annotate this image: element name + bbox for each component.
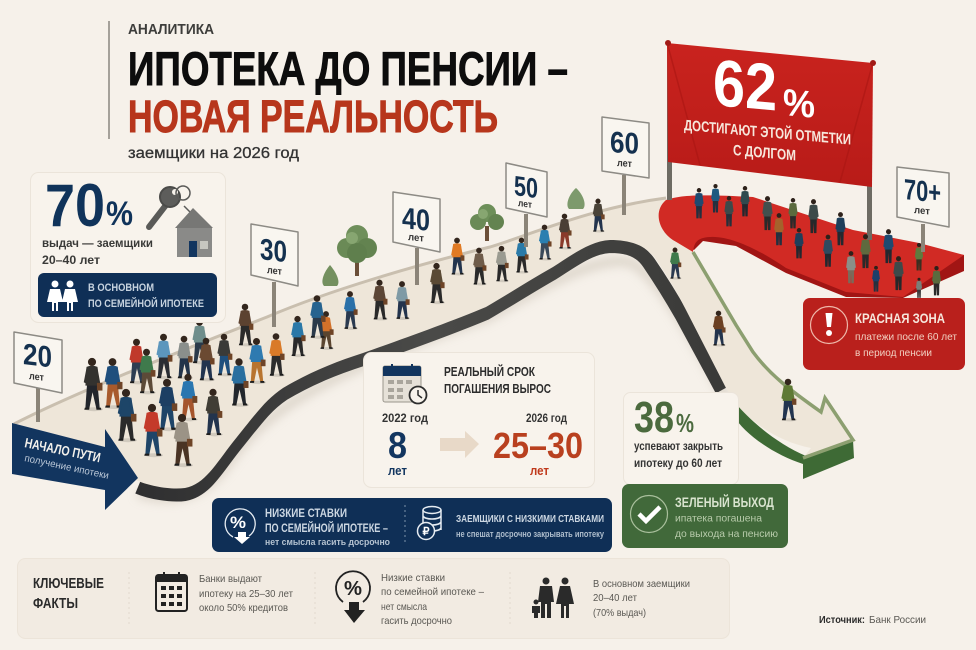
- panel: repayment term: ПОГАШЕНИЯ ВЫРОС: [444, 382, 551, 396]
- source: Источник:: [819, 614, 865, 626]
- panel: green exit: [622, 484, 788, 548]
- panel: repayment term: 25–30: [493, 425, 583, 466]
- age sign 20: [14, 332, 62, 422]
- start arrow caption: получение ипотеки: [23, 453, 110, 482]
- panel: 70% of issuance: [30, 172, 226, 322]
- people on the red platform: [694, 184, 941, 298]
- age sign 30: лет: [267, 265, 282, 278]
- 2022 value: 2022 год: [382, 413, 429, 425]
- fact 2 text: Низкие ставки: [381, 572, 445, 584]
- subtitle: заемщики на 2026 год: [128, 145, 299, 162]
- age sign 60: лет: [617, 158, 632, 170]
- age sign 20: лет: [29, 371, 44, 384]
- age sign 20: 20: [23, 338, 52, 375]
- low rates text: НИЗКИЕ СТАВКИ: [265, 508, 347, 520]
- panel: 38%: %: [676, 408, 694, 438]
- 70 percent figure: 70: [45, 172, 105, 239]
- age sign 60: 60: [610, 126, 639, 161]
- icon: coins: [418, 506, 441, 540]
- people on the green exit road: [670, 248, 797, 421]
- banner: 62%: С ДОЛГОМ: [733, 142, 796, 165]
- banner posts: [667, 45, 872, 240]
- panel: red zone: [803, 298, 965, 370]
- fact 1 text: около 50% кредитов: [199, 602, 288, 614]
- header: [108, 21, 568, 162]
- fact 3 text: [593, 578, 690, 619]
- fact 2 text: нет смысла: [381, 601, 427, 613]
- tree 2: [470, 204, 504, 241]
- icon: key: [149, 186, 192, 227]
- fact 1 text: ипотеку на 25–30 лет: [199, 588, 293, 600]
- navy note: В ОСНОВНОМ: [88, 282, 154, 294]
- panel: green exit: до выхода на пенсию: [675, 528, 778, 540]
- panel: 70% of issuance: %: [106, 195, 133, 233]
- small bush 2: [567, 188, 585, 209]
- banner: 62%: %: [783, 82, 815, 127]
- source: Банк России: [869, 614, 926, 626]
- icon: percent down: %: [230, 513, 246, 532]
- panel: repayment term: [364, 352, 594, 488]
- panel: low rates banner: не спешат досрочно закрывать ипотеку: [456, 529, 604, 539]
- fact 3 text: 20–40 лет: [593, 592, 637, 604]
- fact 2 text: по семейной ипотеке –: [381, 586, 484, 598]
- panel: key facts: ФАКТЫ: [33, 595, 78, 612]
- age sign 50: [506, 163, 547, 247]
- small bush 1: [322, 265, 338, 286]
- icon: couple: [47, 280, 78, 311]
- panel: red zone: в период пенсии: [855, 347, 932, 359]
- source: [819, 614, 926, 626]
- age sign 70+: лет: [914, 205, 930, 218]
- icon: family: [532, 578, 574, 618]
- panel: 38%: [624, 392, 738, 484]
- age sign 40: [393, 192, 440, 285]
- panel: key facts: [18, 558, 730, 638]
- road surface: [12, 198, 853, 489]
- age sign 50: 50: [514, 170, 538, 204]
- icon: house: [175, 208, 213, 257]
- tree 1: [337, 225, 377, 276]
- green road side: [733, 398, 854, 479]
- fact 3 text: В основном заемщики: [593, 578, 690, 590]
- banner caption: ДОСТИГАЮТ ЭТОЙ ОТМЕТКИ: [684, 116, 851, 149]
- age sign 30: 30: [260, 233, 287, 269]
- 2026 value: 2026 год: [526, 413, 568, 425]
- fact 3 text: (70% выдач): [593, 607, 646, 619]
- panel: green exit: ЗЕЛЕНЫЙ ВЫХОД: [675, 493, 774, 510]
- trees: [322, 188, 585, 286]
- age sign 50: лет: [518, 198, 532, 211]
- title line 2: НОВАЯ РЕАЛЬНОСТЬ: [128, 91, 498, 142]
- panel: repayment term: лет: [530, 463, 549, 478]
- road illustration: [12, 198, 854, 498]
- icon: calendar with clock: [383, 364, 426, 404]
- panel: repayment term: 8: [388, 425, 407, 466]
- eyebrow label: АНАЛИТИКА: [128, 21, 214, 38]
- icon: calendar: [156, 572, 187, 611]
- age sign 70+: 70+: [904, 174, 941, 210]
- panel: red zone: КРАСНАЯ ЗОНА: [855, 311, 945, 326]
- age sign 70+: [897, 167, 949, 252]
- red zone platform: [659, 195, 964, 298]
- panel: 38%: ипотеку до 60 лет: [634, 458, 722, 470]
- borrowers text: ЗАЕМЩИКИ С НИЗКИМИ СТАВКАМИ: [456, 513, 604, 525]
- age sign 40: лет: [408, 232, 424, 245]
- icon: percent down: [225, 509, 255, 544]
- icon: check: [630, 496, 668, 532]
- panel: low rates banner: [212, 498, 612, 552]
- title line 1: ИПОТЕКА ДО ПЕНСИИ –: [128, 42, 568, 95]
- panel: 38%: 38: [634, 393, 674, 442]
- navy note: [38, 273, 217, 317]
- coin ruble sign: ₽: [422, 526, 430, 538]
- fact 2 text: гасить досрочно: [381, 615, 452, 627]
- icon: percent with down arrow: [336, 571, 370, 623]
- panel: red zone: платежи после 60 лет: [855, 331, 957, 343]
- start arrow: [12, 423, 138, 510]
- share caption: выдач — заемщики: [42, 236, 153, 250]
- arrow between years: [440, 431, 479, 458]
- navy note: ПО СЕМЕЙНОЙ ИПОТЕКЕ: [88, 297, 204, 310]
- panel: low rates banner: ПО СЕМЕЙНОЙ ИПОТЕКЕ –: [265, 522, 388, 535]
- term heading: РЕАЛЬНЫЙ СРОК: [444, 364, 535, 379]
- fact 2 text: [381, 572, 484, 627]
- 38% caption: успевают закрыть: [634, 441, 723, 453]
- key facts heading: КЛЮЧЕВЫЕ: [33, 575, 104, 592]
- fact 1 text: [199, 573, 293, 614]
- age sign 30: [251, 224, 298, 327]
- crowd on the rising road: [84, 199, 605, 467]
- panel: 70% of issuance: 20–40 лет: [42, 253, 100, 267]
- icon: percent with down arrow: %: [344, 578, 362, 600]
- fact 1 text: Банки выдают: [199, 573, 262, 585]
- panel: low rates banner: нет смысла гасить досрочно: [265, 537, 390, 548]
- banner number: 62: [713, 46, 777, 126]
- age sign 40: 40: [402, 202, 430, 238]
- start arrow title: НАЧАЛО ПУТИ: [23, 435, 102, 465]
- panel: green exit: ипатека погашена: [675, 512, 762, 524]
- banner: 62%: [665, 40, 876, 240]
- icon: warning: [810, 306, 848, 344]
- age sign 60: [602, 117, 649, 215]
- road dark edge: [138, 246, 722, 495]
- panel: repayment term: лет: [388, 463, 407, 478]
